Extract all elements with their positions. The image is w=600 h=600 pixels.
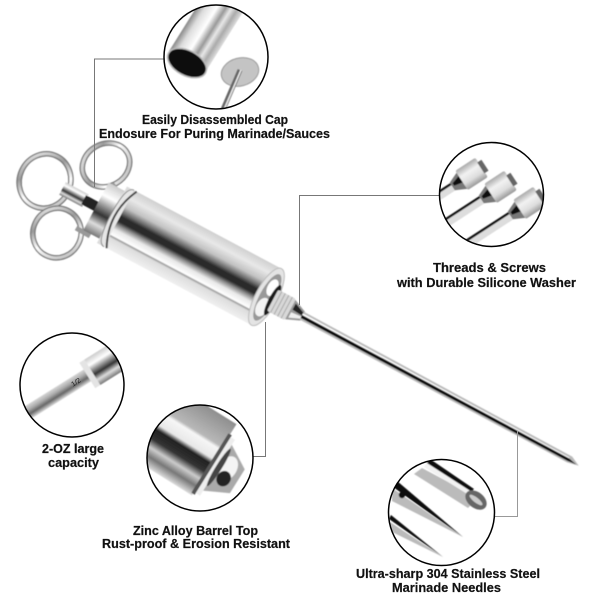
heading: needles caption: Marinade Needles bbox=[392, 581, 501, 595]
circle outline bbox=[388, 460, 494, 566]
connector: needles callout bbox=[495, 431, 518, 516]
finger rings bbox=[10, 135, 138, 266]
heading: capacity caption: capacity bbox=[48, 456, 99, 470]
heading: barrel top caption: Rust-proof & Erosion Resistant bbox=[102, 537, 291, 551]
circle outline bbox=[164, 5, 268, 109]
photo: three needle tips bbox=[388, 459, 490, 557]
heading: barrel top caption: Zinc Alloy Barrel Top bbox=[133, 524, 258, 538]
panel: barrel top detail bbox=[146, 404, 254, 512]
heading: capacity caption bbox=[42, 442, 104, 470]
photo: barrel tube and plunger disc bbox=[166, 6, 260, 108]
heading: barrel top caption bbox=[102, 524, 291, 551]
syringe bbox=[10, 135, 595, 492]
panel: needles detail bbox=[388, 459, 494, 566]
heading: cap caption: Endosure For Puring Marinade/Sauces bbox=[99, 127, 330, 141]
photo: three threaded nozzles bbox=[440, 158, 543, 244]
heading: threads caption bbox=[396, 261, 576, 290]
photo: plunger rod with collar: 1/2 bbox=[70, 377, 82, 388]
photo: barrel end closeup bbox=[148, 406, 246, 496]
circle outline bbox=[440, 142, 544, 246]
panel: capacity detail bbox=[19, 332, 125, 438]
circle outline bbox=[20, 333, 124, 437]
heading: threads caption: with Durable Silicone Washer bbox=[396, 276, 576, 290]
connector: barrel top callout bbox=[253, 322, 266, 456]
heading: cap caption bbox=[99, 113, 330, 141]
heading: needles caption: Ultra-sharp 304 Stainless Steel bbox=[356, 567, 540, 581]
barrel, collar and needle bbox=[47, 160, 595, 492]
connector: cap callout bbox=[94, 59, 164, 187]
circle outline bbox=[147, 405, 253, 511]
connector: threads callout bbox=[300, 196, 439, 305]
heading: cap caption: Easily Disassembled Cap bbox=[142, 113, 288, 127]
heading: needles caption bbox=[356, 567, 540, 595]
panel: threads detail bbox=[438, 142, 544, 248]
heading: threads caption: Threads & Screws bbox=[433, 261, 546, 275]
heading: capacity caption: 2-OZ large bbox=[42, 442, 104, 456]
panel: cap detail bbox=[163, 0, 268, 112]
